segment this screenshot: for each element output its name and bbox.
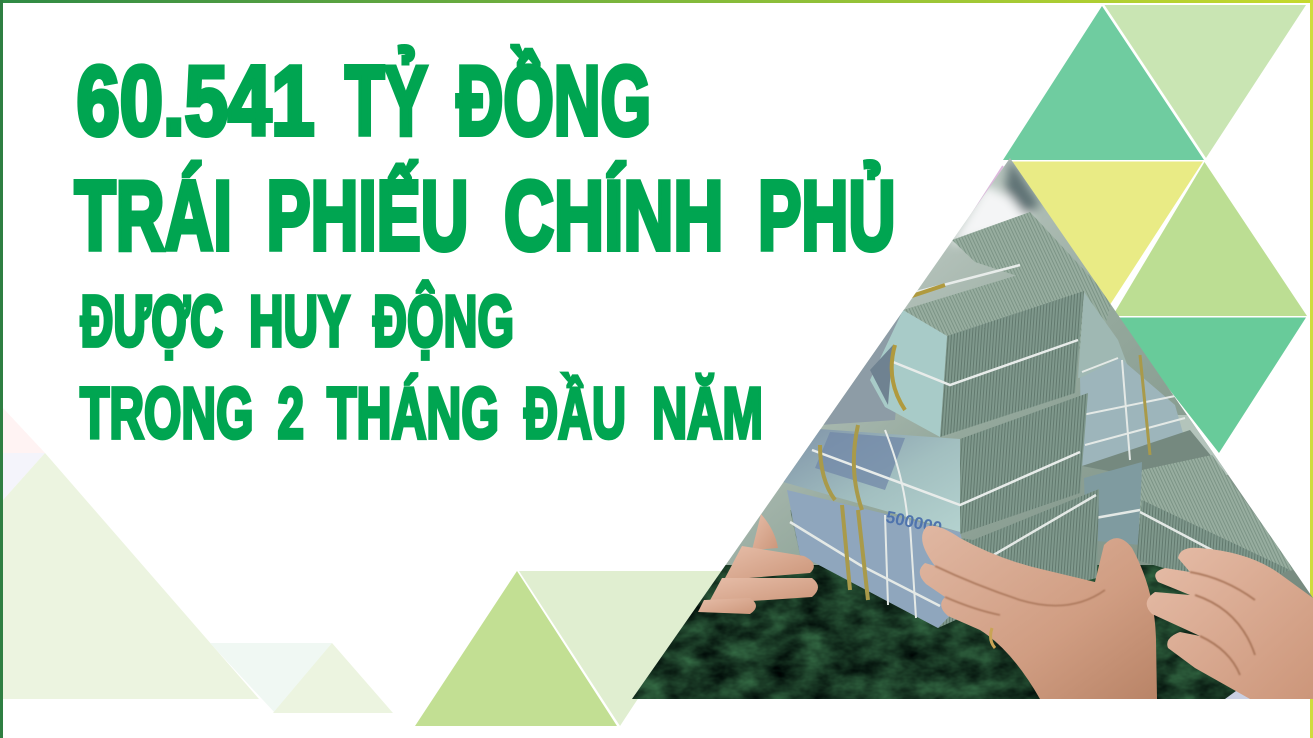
note denomination: 500000	[884, 507, 944, 538]
hand: right	[1147, 548, 1313, 699]
hand: centre	[920, 526, 1157, 699]
title line 2: CHÍNH	[504, 160, 724, 270]
background triangles: bottom centre	[415, 571, 722, 726]
hand: left	[698, 514, 818, 614]
title line 2: TRÁI	[74, 160, 232, 270]
title line 2: PHỦ	[758, 160, 896, 270]
title line 1	[76, 46, 651, 156]
corner behind table	[1225, 691, 1250, 699]
marble table	[630, 565, 1270, 700]
title line 1: 60.541	[76, 46, 314, 156]
subtitle line 1: ĐỘNG	[373, 281, 514, 362]
top stack	[870, 265, 1084, 437]
middle stack	[783, 393, 1088, 538]
title line 1: TỶ	[345, 46, 428, 156]
blurred background	[950, 158, 1040, 245]
subtitle line 2: NĂM	[652, 374, 763, 454]
right front stack	[1084, 455, 1294, 574]
subtitle line 2: 2	[278, 374, 304, 454]
bottom stack	[787, 489, 1099, 628]
right background	[1142, 415, 1228, 475]
title line 1: ĐỒNG	[456, 46, 651, 156]
subtitle line 1	[80, 281, 514, 362]
title line 2	[74, 160, 896, 270]
back stacks	[952, 212, 1212, 475]
subtitle line 1: ĐƯỢC	[80, 282, 223, 362]
subtitle line 2	[80, 373, 763, 454]
side notes at the left of the stacks	[824, 309, 904, 425]
subtitle line 2: TRONG	[80, 374, 254, 454]
background triangles: bottom left	[3, 408, 393, 713]
subtitle line 1: HUY	[249, 282, 350, 362]
mosaic triangles: top right	[958, 5, 1307, 453]
title line 2: PHIẾU	[266, 160, 468, 270]
subtitle line 2: THÁNG	[327, 374, 499, 454]
photo: stacks of banknotes and hands on a marble table	[630, 150, 1313, 700]
subtitle line 2: ĐẦU	[524, 373, 626, 454]
